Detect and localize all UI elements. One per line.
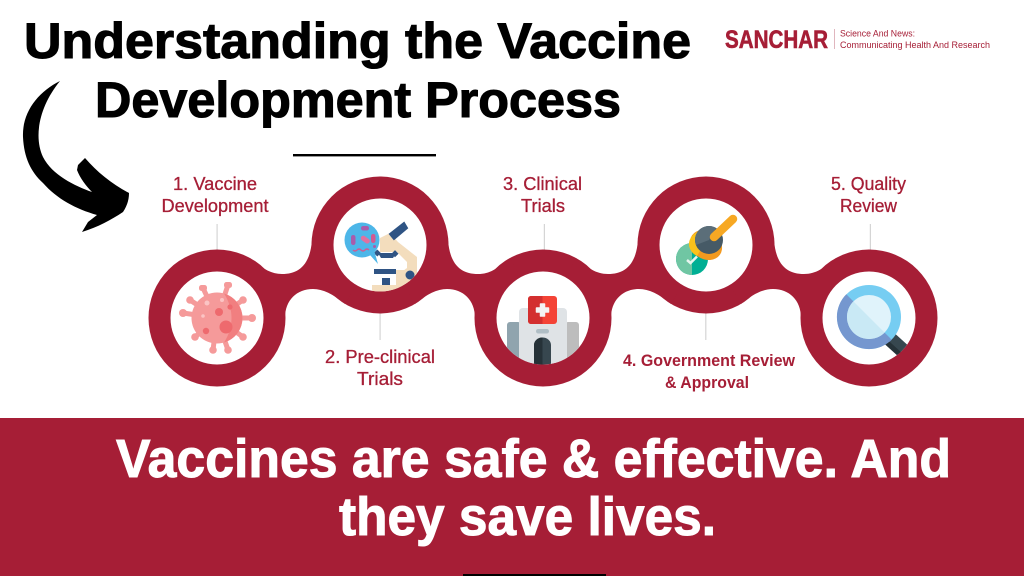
icon: microscope xyxy=(344,222,418,296)
logo: Sanchar xyxy=(725,26,990,54)
label: step 2: 2. Pre-clinical xyxy=(325,347,435,367)
label: step 4: & Approval xyxy=(665,374,749,392)
banner xyxy=(0,418,1024,576)
label: step 3: 3. Clinical xyxy=(503,174,582,194)
label: step 3 xyxy=(503,174,582,216)
icon: virus xyxy=(179,282,256,354)
label: step 3: Trials xyxy=(521,196,565,216)
label: step 2: Trials xyxy=(357,369,403,389)
process chain xyxy=(148,176,938,386)
banner text: they save lives. xyxy=(339,487,716,547)
title: Understanding the Vaccine xyxy=(24,13,691,69)
logo: Sanchar: SANCHAR xyxy=(725,26,828,54)
label: step 1: 1. Vaccine xyxy=(173,174,257,194)
title: Development Process xyxy=(95,72,621,128)
title xyxy=(24,13,691,128)
icon: magnifying glass xyxy=(837,285,910,360)
label: step 1 xyxy=(162,174,268,216)
leader lines xyxy=(216,224,871,340)
icon: approval stamp xyxy=(676,219,733,275)
label: step 2 xyxy=(325,347,435,389)
label: step 5: 5. Quality xyxy=(831,174,906,194)
logo: Sanchar: Communicating Health And Research xyxy=(840,40,990,50)
icon: hospital xyxy=(507,296,579,368)
banner text: Vaccines are safe & effective. And xyxy=(116,429,951,489)
label: step 4 xyxy=(623,352,795,392)
label: step 4: 4. Government Review xyxy=(623,352,795,370)
label: step 5 xyxy=(831,174,906,216)
label: step 5: Review xyxy=(840,196,898,216)
banner text xyxy=(116,429,951,547)
icon: curved arrow xyxy=(23,81,129,232)
label: step 1: Development xyxy=(162,196,268,216)
logo: Sanchar: Science And News: xyxy=(840,28,915,38)
